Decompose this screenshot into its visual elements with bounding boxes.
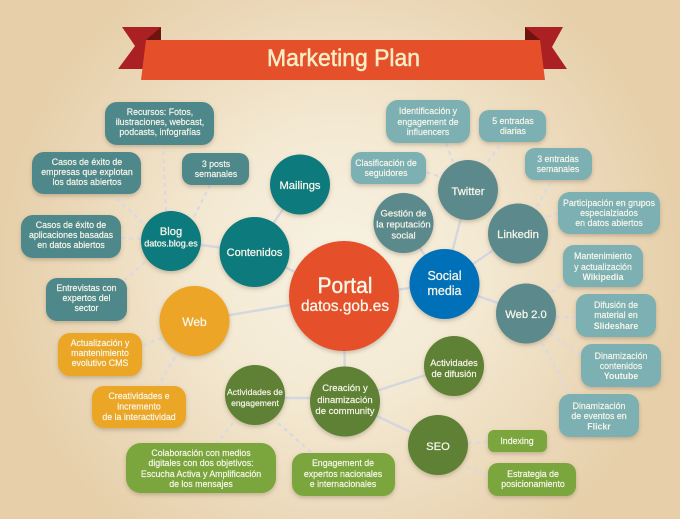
node: portal (centre): datos.gob.es [301, 298, 389, 315]
box: estrategia de posicionamiento: posicionamiento [501, 479, 565, 489]
node: actividades de difusión: Actividades [430, 358, 478, 368]
box: creatividades [92, 386, 186, 428]
box: creatividades: Creatividades e [108, 391, 170, 401]
box: colaboración con medios: Colaboración con medios [151, 448, 251, 458]
node: portal (centre) [289, 241, 399, 351]
box: participación en grupos: en datos abiertos [575, 218, 643, 228]
box: colaboración con medios: de los mensajes [169, 479, 233, 489]
node: actividades de difusión [424, 336, 484, 396]
box: casos de éxito de aplicaciones [21, 215, 121, 258]
box: 5 entradas diarias: diarias [500, 126, 527, 136]
box: slideshare [576, 294, 656, 337]
box: 5 entradas diarias [479, 110, 546, 142]
box: colaboración con medios: digitales con dos objetivos: [148, 458, 254, 468]
box: clasificación de seguidores [351, 152, 426, 184]
box: engagement de expertos: e internacionales [310, 479, 377, 489]
box: 5 entradas diarias: 5 entradas [492, 116, 534, 126]
box: recursos: ilustraciones, webcast, [116, 117, 204, 127]
node: actividades de engagement: engagement [231, 398, 279, 408]
box: slideshare: Slideshare [594, 321, 638, 331]
box: wikipedia [563, 245, 643, 287]
box: indexing [488, 430, 547, 452]
box: actualización CMS: Actualización y [71, 338, 130, 348]
node: actividades de engagement [225, 365, 285, 425]
box: slideshare: material en [594, 310, 638, 320]
box: indexing: Indexing [500, 436, 534, 446]
solid connectors between main nodes [171, 184, 526, 445]
box: entrevistas: Entrevistas con [56, 283, 117, 293]
box: casos de éxito de aplicaciones: en datos abiertos [37, 240, 105, 250]
box: clasificación de seguidores: seguidores [364, 168, 408, 178]
node: gestión de la reputación social: la reputación [376, 220, 431, 230]
node: mailings: Mailings [279, 180, 321, 192]
box: flickr: Flickr [587, 422, 611, 432]
box: flickr: Dinamización [573, 401, 626, 411]
box: creatividades: incremento [117, 402, 161, 412]
box: clasificación de seguidores: Clasificación de [355, 158, 417, 168]
box: identificación de influencers [386, 100, 470, 143]
box: casos de éxito de aplicaciones: Casos de éxito de [36, 220, 106, 230]
box: colaboración con medios: Escucha Activa y Amplificación [141, 469, 261, 479]
node: contenidos: Contenidos [227, 247, 283, 259]
box: wikipedia: Wikipedia [583, 272, 624, 282]
node: twitter: Twitter [452, 186, 485, 198]
box: entrevistas: sector [75, 303, 99, 313]
node: creación y dinamización de community: de community [315, 406, 375, 417]
box: slideshare: Difusión de [594, 300, 638, 310]
box: casos de éxito de empresas [32, 152, 141, 194]
node: seo: SEO [426, 441, 450, 453]
node: mailings [270, 154, 330, 214]
box: flickr [559, 394, 639, 437]
node: web 2.0: Web 2.0 [505, 309, 547, 321]
box: youtube: Youtube [604, 371, 638, 381]
node: creación y dinamización de community [310, 366, 380, 436]
box: creatividades: de la interactividad [102, 412, 176, 422]
node: social media: media [427, 284, 462, 298]
box: engagement de expertos: expertos nacionales [304, 469, 383, 479]
node: linkedin: Linkedin [497, 229, 539, 241]
box: identificación de influencers: influencers [407, 127, 450, 137]
box: youtube: contenidos [600, 361, 643, 371]
box: recursos [105, 102, 214, 145]
node: twitter [438, 160, 498, 220]
box: recursos: podcasts, infografías [119, 127, 201, 137]
node: contenidos [220, 217, 290, 287]
dashed connectors to detail boxes [115, 142, 581, 476]
box: estrategia de posicionamiento: Estrategia de [507, 469, 559, 479]
box: 3 posts semanales [182, 153, 249, 185]
box: actualización CMS: mantenimiento [71, 348, 129, 358]
box: engagement de expertos: Engagement de [312, 458, 374, 468]
node: linkedin [488, 204, 548, 264]
title banner [118, 27, 567, 80]
node: social media: Social [427, 269, 462, 283]
box: actualización CMS [58, 333, 142, 376]
node: web [160, 286, 230, 356]
node: blog: Blog [160, 226, 182, 238]
box: 3 posts semanales: 3 posts [202, 159, 231, 169]
node: seo [408, 415, 468, 475]
node: blog [141, 211, 201, 271]
banner body [141, 40, 545, 80]
node: actividades de difusión: de difusión [432, 369, 476, 379]
node: gestión de la reputación social: social [391, 230, 416, 242]
box: entrevistas: expertos del [63, 293, 111, 303]
node: web: Web [182, 315, 207, 329]
box: participación en grupos: Participación en grupos [563, 198, 656, 208]
node: creación y dinamización de community: Creación y [322, 383, 368, 394]
node: blog: datos.blog.es [144, 238, 198, 248]
box: casos de éxito de aplicaciones: aplicaciones basadas [29, 230, 114, 240]
box: casos de éxito de empresas: Casos de éxito de [52, 157, 122, 167]
box: casos de éxito de empresas: empresas que explotan [41, 167, 133, 177]
box: youtube [581, 344, 661, 387]
box: 3 entradas semanales: 3 entradas [537, 154, 579, 164]
node: gestión de la reputación social: Gestión de [381, 208, 426, 220]
box: engagement de expertos [292, 453, 395, 496]
box: flickr: de eventos en [571, 411, 627, 421]
box: youtube: Dinamización [595, 351, 648, 361]
box: identificación de influencers: engagement de [397, 117, 459, 127]
node: creación y dinamización de community: dinamización [317, 395, 373, 406]
right ribbon tail [525, 27, 567, 69]
node: web 2.0 [496, 284, 556, 344]
box: wikipedia: y actualización [574, 262, 632, 272]
box: identificación de influencers: Identificación y [399, 106, 458, 116]
node: gestión de la reputación social [374, 193, 434, 253]
node: portal (centre): Portal [318, 273, 372, 298]
box: 3 entradas semanales [525, 148, 592, 180]
node: social media [410, 249, 480, 319]
title text: Marketing Plan [267, 45, 420, 72]
box: participación en grupos [558, 192, 660, 234]
node: actividades de engagement: Actividades de [227, 387, 283, 397]
box: casos de éxito de empresas: los datos abiertos [53, 177, 122, 187]
box: recursos: Recursos: Fotos, [127, 107, 193, 117]
box: 3 entradas semanales: semanales [537, 164, 580, 174]
box: colaboración con medios [126, 443, 276, 493]
box: estrategia de posicionamiento [488, 463, 576, 496]
left ribbon tail [118, 27, 161, 69]
box: entrevistas [46, 278, 127, 321]
box: 3 posts semanales: semanales [195, 169, 238, 179]
box: wikipedia: Mantenimiento [574, 251, 632, 261]
box: participación en grupos: especialziados [580, 208, 638, 218]
box: actualización CMS: evolutivo CMS [72, 358, 128, 368]
